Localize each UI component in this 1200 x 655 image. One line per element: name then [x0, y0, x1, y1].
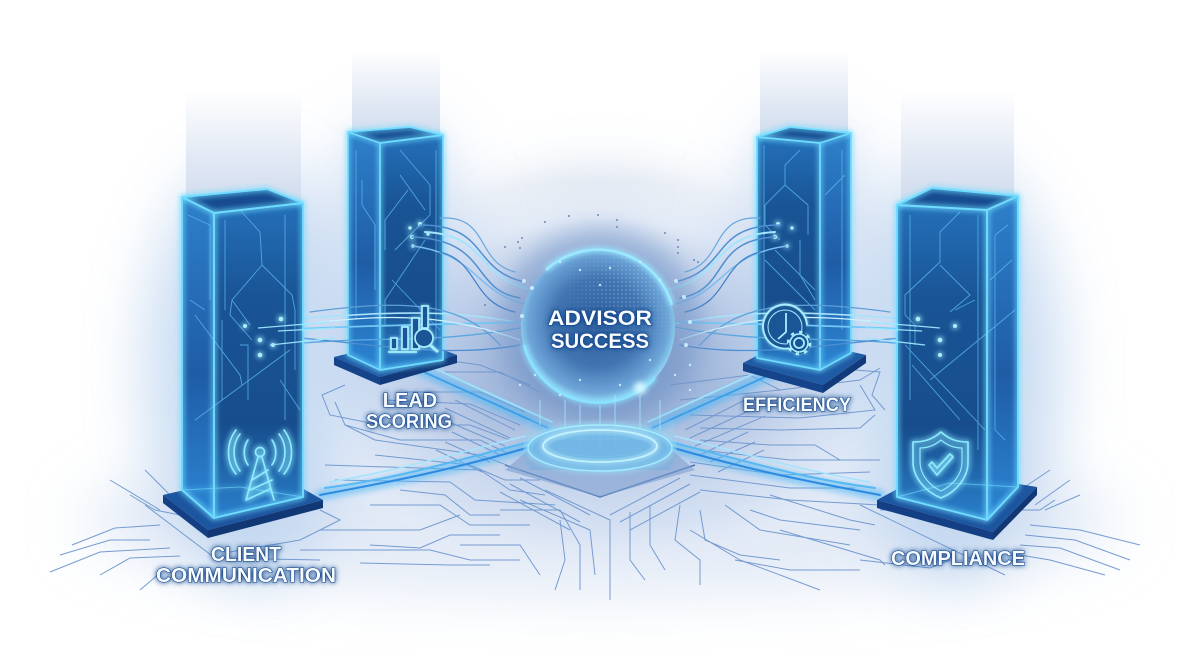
- circuit nodes: [408, 222, 430, 248]
- label: lead scoring: LEAD: [383, 390, 437, 412]
- background glow: [80, 120, 1120, 595]
- stream: compliance to globe: [670, 436, 880, 495]
- pillar: efficiency: [743, 127, 866, 393]
- stream: upper left to globe: [412, 218, 535, 312]
- connector streams: [320, 364, 880, 495]
- label: compliance: COMPLIANCE: [891, 548, 1025, 570]
- pillar: compliance: [865, 188, 1037, 540]
- holographic ring platform: [528, 425, 672, 471]
- circuit lines: [188, 210, 300, 420]
- label: lead scoring: SCORING: [366, 411, 452, 433]
- pillar: lead scoring: [334, 127, 457, 385]
- circuit nodes: [916, 317, 957, 357]
- stream: mid left to globe: [275, 305, 530, 351]
- circuit nodes: [243, 317, 283, 357]
- icon: bar chart with magnifier: [388, 306, 438, 352]
- stream: efficiency base to globe: [648, 364, 785, 428]
- infographic scene: [50, 64, 1140, 613]
- stream: mid right to globe: [670, 305, 925, 351]
- stream: upper right to globe: [665, 218, 787, 312]
- label: advisor success: SUCCESS: [551, 329, 649, 353]
- stream: lead scoring base to globe: [415, 364, 552, 428]
- label: efficiency: EFFICIENCY: [743, 395, 851, 416]
- globe platform glow: [505, 420, 695, 497]
- icon: clock with gear: [763, 305, 810, 354]
- label: advisor success: ADVISOR: [548, 306, 652, 330]
- globe: [484, 214, 700, 450]
- label: client communication: CLIENT: [211, 544, 281, 566]
- globe particles: [519, 261, 692, 396]
- label: client communication: COMMUNICATION: [156, 565, 336, 587]
- circuit lines: [764, 145, 845, 330]
- icon: signal tower: [228, 430, 292, 500]
- pillar: client communication: [163, 189, 335, 538]
- circuit nodes: [773, 222, 794, 248]
- circuit lines: [905, 212, 1015, 450]
- dark data particles: [484, 214, 699, 306]
- circuit lines: [356, 150, 440, 340]
- connector streams over pillars: [275, 218, 925, 351]
- stream: client communication to globe: [320, 436, 530, 495]
- icon: shield with check: [913, 432, 968, 498]
- light beams above pillars: [186, 50, 1014, 203]
- floor circuit traces: [50, 360, 1140, 600]
